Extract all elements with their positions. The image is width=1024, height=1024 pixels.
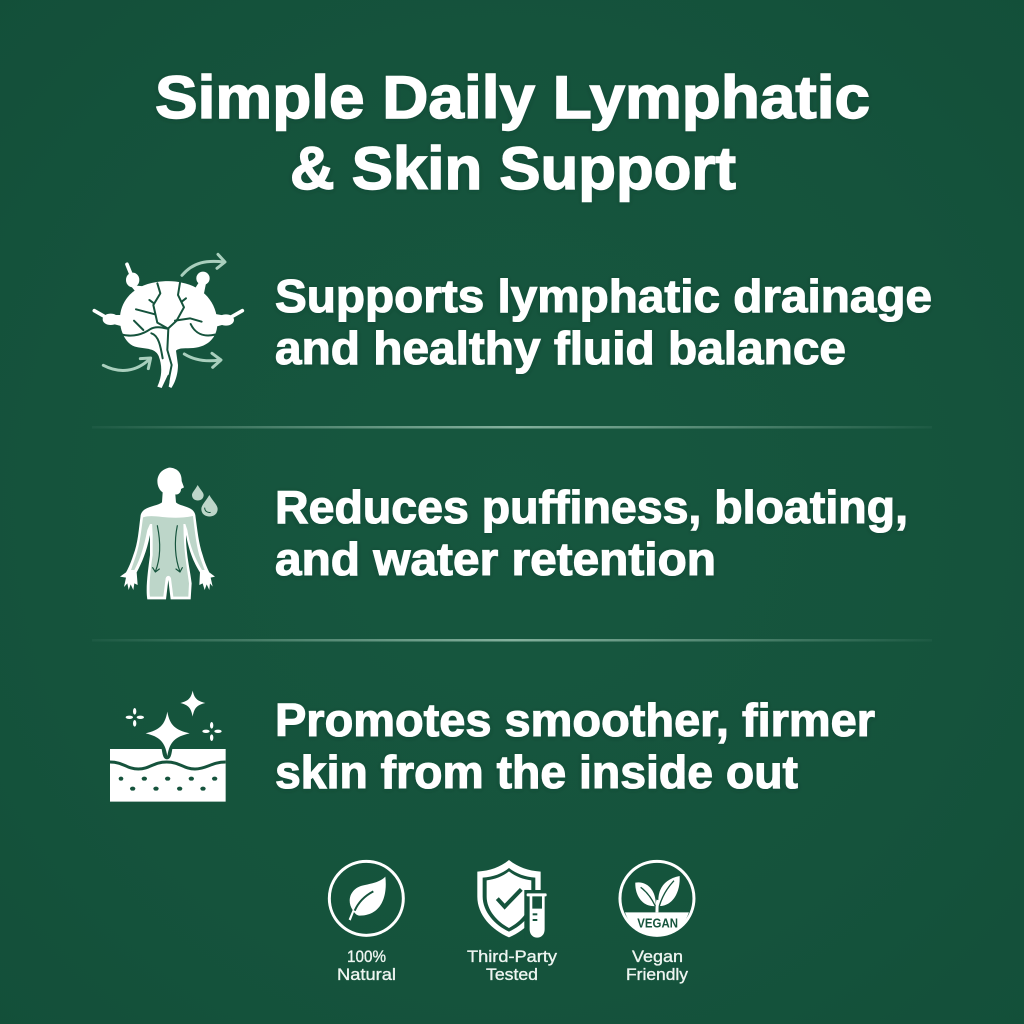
icon: leaf <box>329 861 403 935</box>
badge: third-party tested: Tested <box>486 965 538 984</box>
badge: vegan friendly: Friendly <box>626 965 689 984</box>
text: lymphatic drainage: Supports lymphatic drainage <box>275 270 932 322</box>
badge: third-party tested: Third-Party <box>467 947 558 966</box>
text: skin: skin from the inside out <box>275 746 798 798</box>
text: puffiness <box>275 481 908 585</box>
title: & Skin Support <box>290 135 736 202</box>
text: skin: Promotes smoother, firmer <box>275 694 875 746</box>
badge: vegan friendly <box>620 861 694 984</box>
badge: 100% natural <box>329 861 403 984</box>
icon: skin layers with sparkles <box>110 691 226 802</box>
badge: third-party tested <box>467 860 558 984</box>
text: puffiness: and water retention <box>275 533 716 585</box>
text: skin <box>275 694 875 798</box>
icon: vegan sprout: VEGAN <box>637 916 678 931</box>
badge: 100% natural: Natural <box>337 965 396 984</box>
text: lymphatic drainage <box>275 270 932 374</box>
text: puffiness: Reduces puffiness, bloating, <box>275 481 908 533</box>
title: Simple Daily Lymphatic <box>155 64 870 131</box>
icon: body with water drops <box>120 468 218 599</box>
icon: lymphatic system <box>94 254 242 388</box>
badge: vegan friendly: Vegan <box>632 947 683 966</box>
text: lymphatic drainage: and healthy fluid balance <box>275 322 846 374</box>
badge: 100% natural: 100% <box>347 947 386 966</box>
title <box>155 64 870 202</box>
icon: shield with test tube <box>477 860 550 939</box>
